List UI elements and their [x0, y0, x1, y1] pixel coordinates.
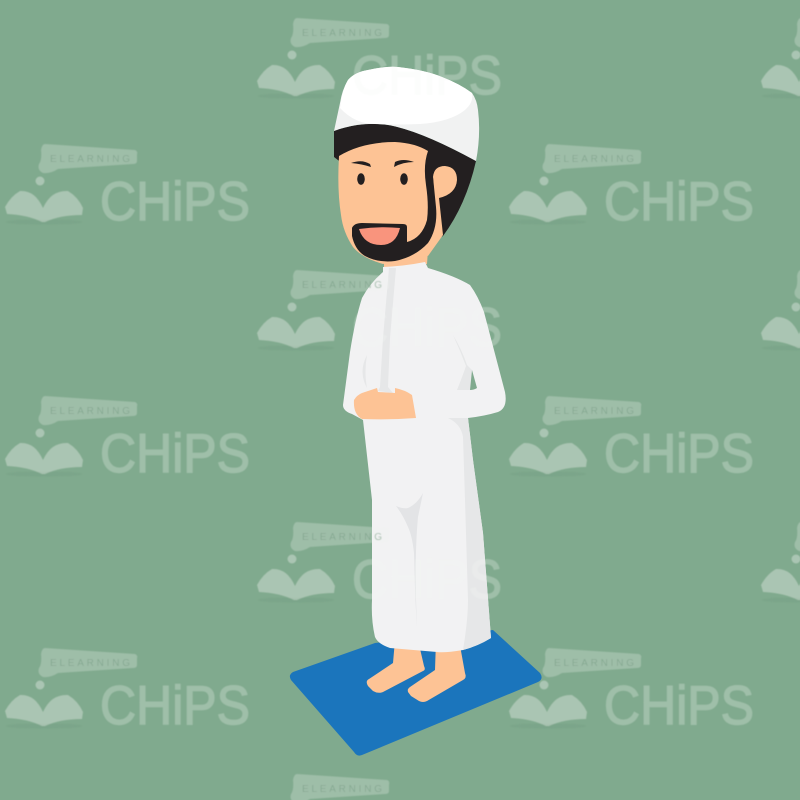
eyes	[357, 173, 408, 185]
sleeve fold	[362, 355, 367, 388]
ear and neck strip	[418, 166, 457, 256]
watermark tile 11: CHiPS	[352, 548, 502, 610]
watermark tile 11	[257, 522, 502, 610]
watermark tile 7	[257, 18, 502, 106]
watermark tile 13: ELEARNING	[302, 784, 382, 795]
watermark tile 2: CHiPS	[604, 170, 754, 232]
watermark tile 5	[5, 648, 250, 736]
watermark tile 10	[761, 270, 800, 350]
watermark tile 6: ELEARNING	[554, 658, 634, 669]
watermark tile 3: CHiPS	[100, 422, 250, 484]
left foot	[367, 640, 425, 693]
watermark tile 9: ELEARNING	[302, 280, 382, 291]
robe	[343, 262, 506, 652]
watermark tile 1	[5, 144, 250, 232]
watermark tile 5: CHiPS	[100, 674, 250, 736]
mouth	[359, 227, 400, 245]
watermark tile 3: ELEARNING	[50, 406, 130, 417]
watermark tile 1: CHiPS	[100, 170, 250, 232]
watermark tile 1: ELEARNING	[50, 154, 130, 165]
watermark tile 13	[290, 774, 389, 800]
watermark tile 6	[509, 648, 754, 736]
prayer mat	[290, 630, 542, 756]
watermark tile 2	[509, 144, 754, 232]
hands	[354, 388, 416, 419]
arm gap	[470, 370, 477, 390]
face	[338, 142, 428, 264]
watermark tile 3	[5, 396, 250, 484]
watermark tile 9	[257, 270, 502, 358]
right foot	[408, 640, 466, 702]
watermark tile 2: ELEARNING	[554, 154, 634, 165]
watermark tile 5: ELEARNING	[50, 658, 130, 669]
beard and sideburn	[352, 151, 436, 261]
watermark tile 4: CHiPS	[604, 422, 754, 484]
robe right shade	[448, 418, 491, 650]
watermark tile 4: ELEARNING	[554, 406, 634, 417]
watermark tile 9: CHiPS	[352, 296, 502, 358]
body side shade	[453, 335, 472, 390]
hair back	[334, 124, 476, 250]
watermark tile 7: ELEARNING	[302, 28, 382, 39]
watermark tile 6: CHiPS	[604, 674, 754, 736]
eyebrows	[351, 160, 414, 167]
watermark tile 4	[509, 396, 754, 484]
hat highlight	[340, 67, 472, 124]
hat	[334, 67, 479, 161]
watermark tile 11: ELEARNING	[302, 532, 382, 543]
watermark tile 7: CHiPS	[352, 44, 502, 106]
gown centre fold	[396, 493, 423, 627]
watermark tile 8	[761, 18, 800, 98]
placket	[378, 268, 396, 393]
man figure	[334, 67, 506, 702]
neck	[384, 250, 428, 268]
watermark tile 12	[761, 522, 800, 602]
